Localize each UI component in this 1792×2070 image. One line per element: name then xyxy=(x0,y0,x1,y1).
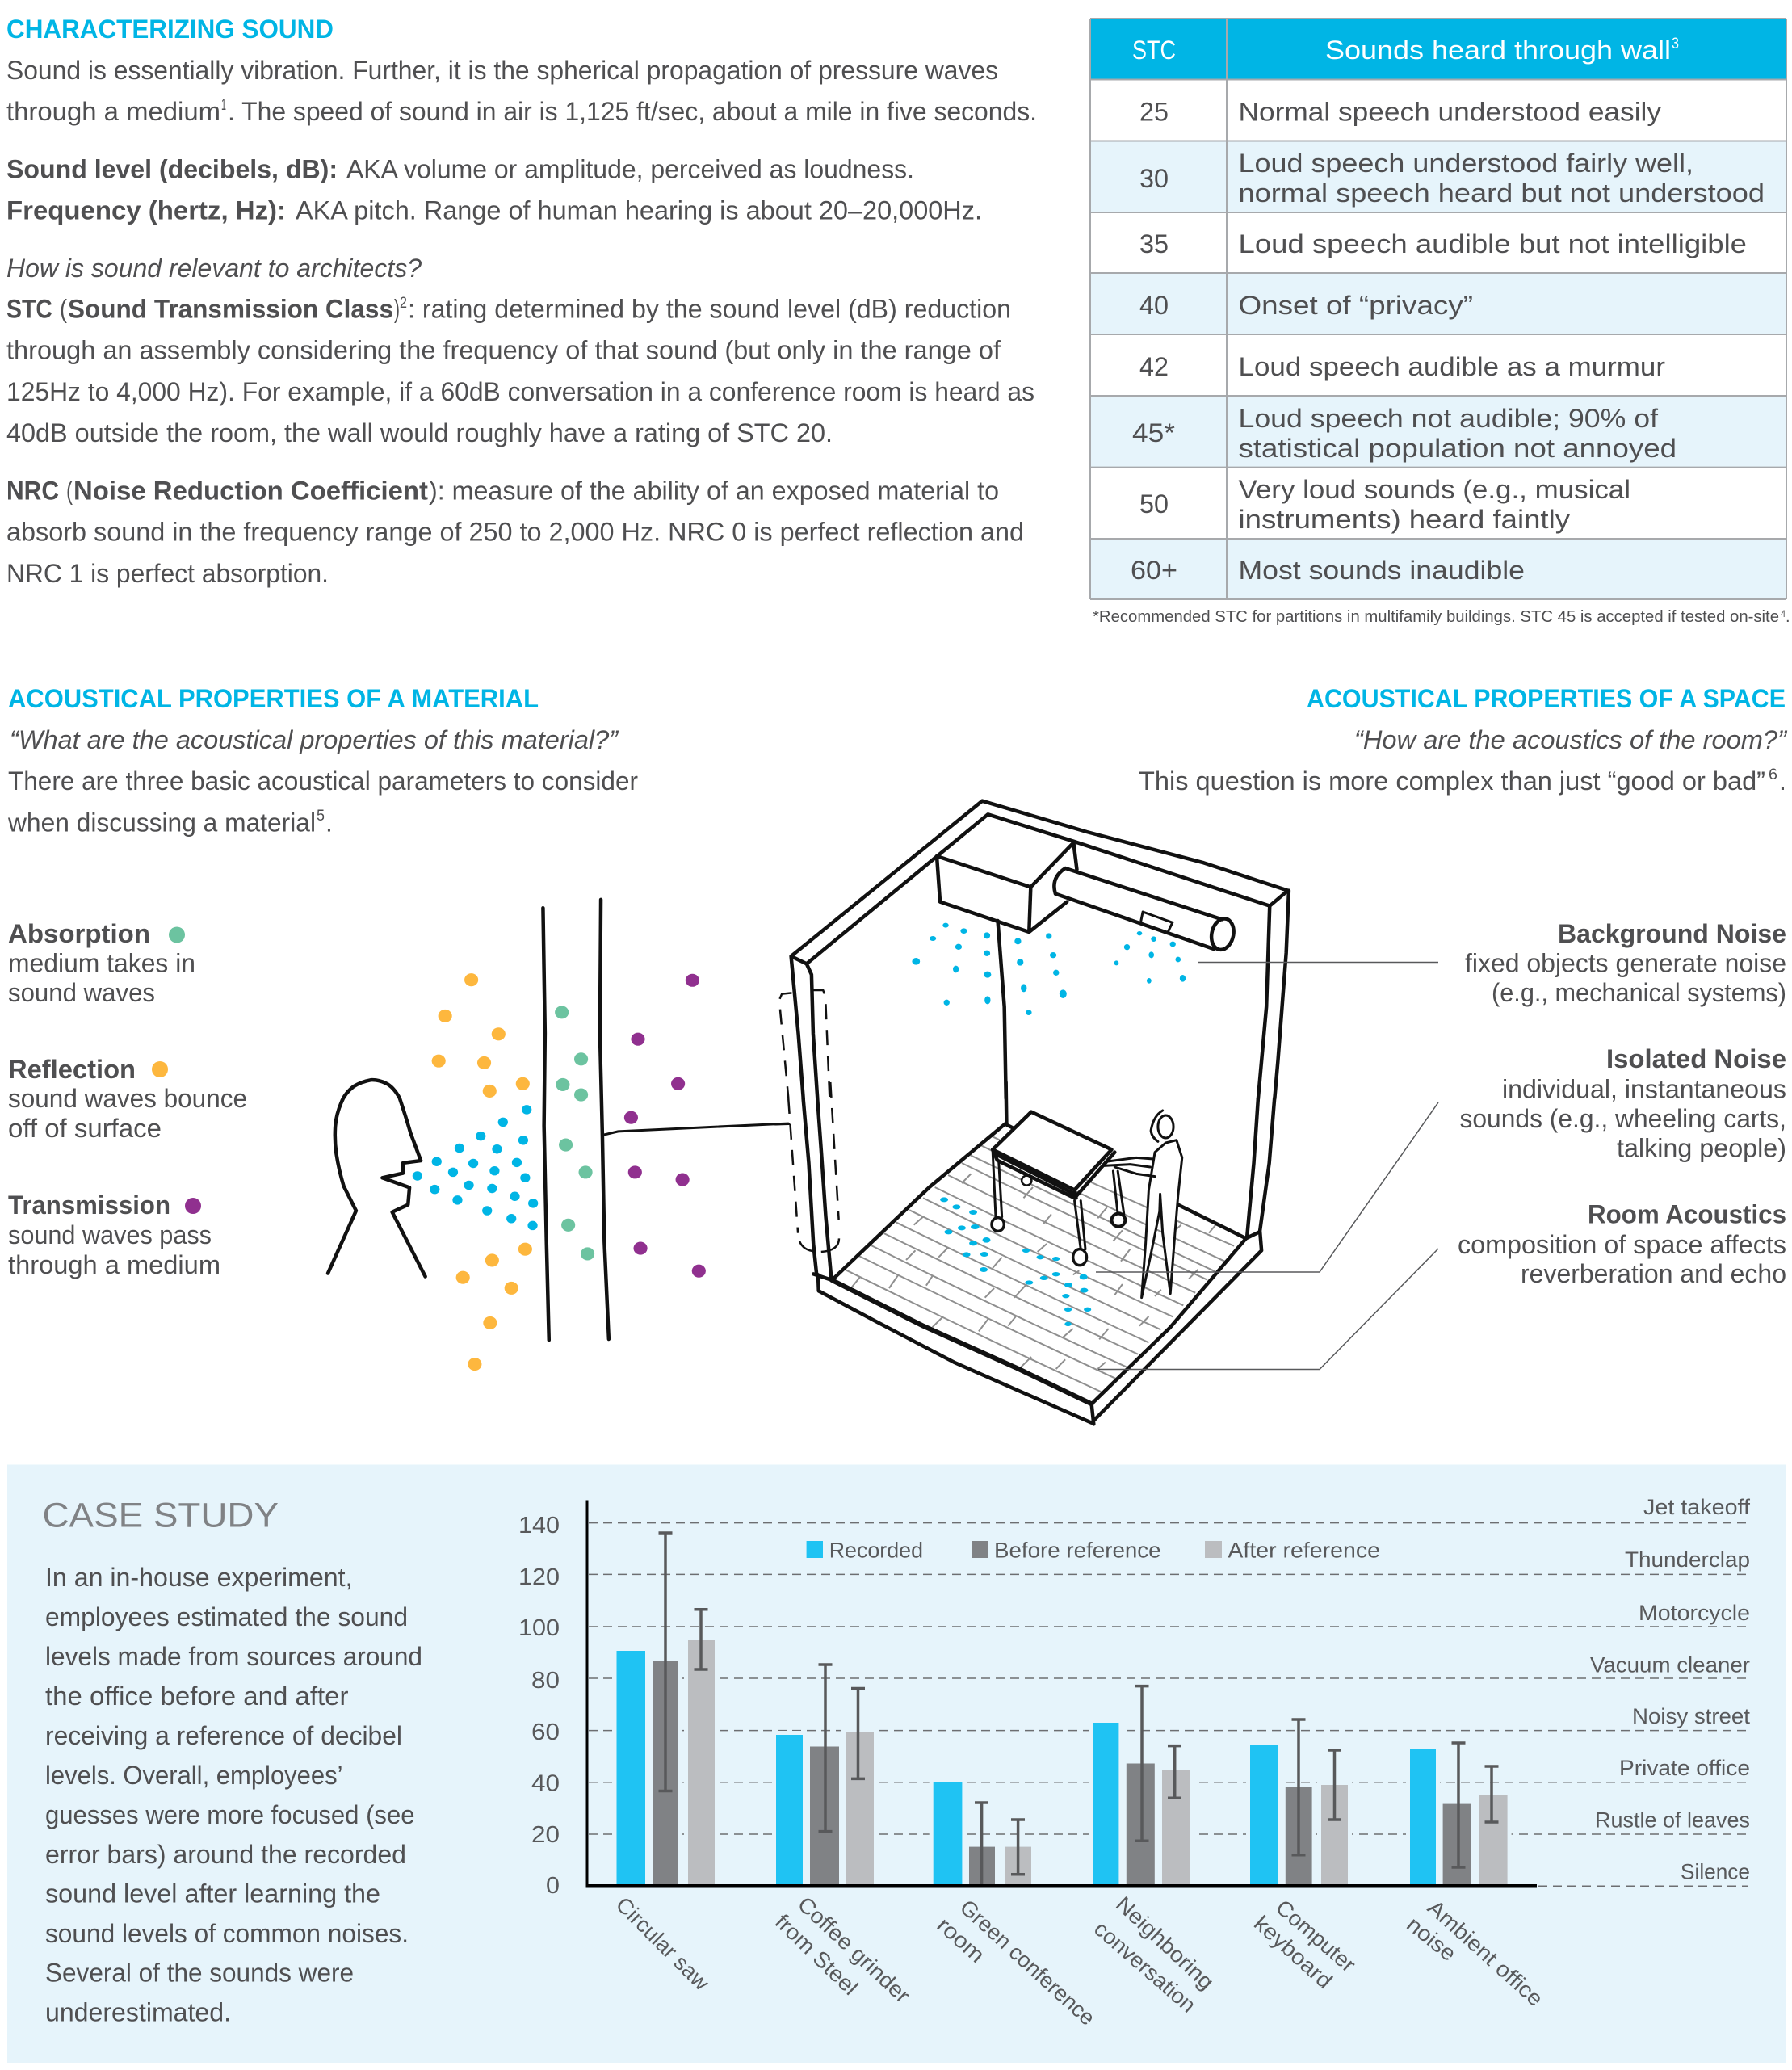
callout: background noise: Background Noise xyxy=(1558,919,1786,948)
row 40: Onset of “privacy” xyxy=(1239,291,1473,320)
footnote: *Recommended STC for partitions in multifamily buildings. STC 45 is accepted if tested on-site xyxy=(1093,608,1779,626)
text block: intro: through a medium xyxy=(6,97,220,126)
dots: absorbed sound xyxy=(555,1006,594,1260)
sound reference labels: Silence xyxy=(1681,1859,1750,1883)
text block: intro xyxy=(6,56,1037,126)
text block: STC definition: through an assembly considering the frequency of that sound (but only in the range of xyxy=(6,336,1001,365)
sound reference labels xyxy=(1590,1495,1751,1883)
y axis labels: 0 xyxy=(546,1873,560,1899)
text block: STC definition: 40dB outside the room, the wall would roughly have a rating of STC 20. xyxy=(6,418,833,447)
icon: pipe xyxy=(1054,868,1236,951)
callout: isolated noise: sounds (e.g., wheeling carts, xyxy=(1460,1104,1786,1133)
row 42: Loud speech audible as a murmur xyxy=(1239,352,1665,381)
text block: case study description: employees estimated the sound xyxy=(45,1602,408,1631)
text block: material intro: when discussing a material xyxy=(7,808,316,837)
diagram: speaker and wall with sound particles xyxy=(328,900,788,1371)
text block: STC definition: 125Hz to 4,000 Hz). For example, if a 60dB conversation in a conference room is heard as xyxy=(6,377,1034,406)
legend xyxy=(807,1538,1380,1562)
icon: cart table xyxy=(992,1112,1125,1266)
callout: background noise xyxy=(1465,919,1786,1007)
callout: background noise: fixed objects generate noise xyxy=(1465,948,1786,977)
callout lines xyxy=(1096,963,1438,1370)
sound marks: duct noise xyxy=(912,923,1067,1015)
callout: background noise: (e.g., mechanical systems) xyxy=(1492,978,1786,1007)
text block: STC definition: Sound Transmission Class xyxy=(68,295,393,324)
connector stub from material wall xyxy=(775,1123,789,1126)
row 60+: Most sounds inaudible xyxy=(1239,556,1525,585)
bars: neighboring conversation xyxy=(1093,1686,1190,1885)
legend: Recorded xyxy=(829,1538,923,1562)
icon: mechanical duct xyxy=(937,842,1076,932)
text block: NRC definition: absorb sound in the frequency range of 250 to 2,000 Hz. NRC 0 is perfect reflection and xyxy=(6,517,1024,546)
text block: material intro: “What are the acoustical properties of this material?” xyxy=(10,725,619,754)
floor boards xyxy=(844,1136,1234,1392)
text block: NRC definition: NRC 1 is perfect absorption. xyxy=(6,559,329,588)
row 50: Very loud sounds (e.g., musical xyxy=(1239,475,1630,504)
row 50 xyxy=(1139,475,1630,534)
text block: NRC definition: NRC xyxy=(6,477,59,506)
dashed callout corner xyxy=(799,1238,839,1252)
text block: case study description xyxy=(45,1563,422,2027)
text block: NRC definition xyxy=(6,477,1024,588)
connector to room wall xyxy=(602,1123,788,1135)
row 35: 35 xyxy=(1139,229,1169,258)
room lower part xyxy=(788,1082,1274,1424)
text block: NRC definition: Noise Reduction Coefficient xyxy=(73,477,428,506)
legend: transmission xyxy=(8,1190,220,1279)
row 50: 50 xyxy=(1139,489,1169,519)
text block: intro: . The speed of sound in air is 1,125 ft/sec, about a mile in five seconds. xyxy=(228,97,1037,126)
row 40 xyxy=(1139,291,1473,320)
category labels: conversation xyxy=(1089,1917,1200,2018)
diagram: room axonometric xyxy=(775,801,1289,1424)
text block: NRC definition: ( xyxy=(66,477,73,506)
y axis labels: 120 xyxy=(518,1564,560,1590)
row 35: Loud speech audible but not intelligible xyxy=(1239,229,1747,258)
callout: room acoustics xyxy=(1458,1200,1786,1288)
row 45: statistical population not annoyed xyxy=(1239,434,1677,463)
y axis labels: 60 xyxy=(531,1719,560,1745)
row 60+ xyxy=(1131,556,1525,585)
legend: reflection: sound waves bounce xyxy=(8,1084,247,1113)
legend: absorption xyxy=(8,919,195,1007)
row 50: instruments) heard faintly xyxy=(1239,505,1570,534)
text block: material intro xyxy=(7,725,638,837)
row 30: Loud speech understood fairly well, xyxy=(1239,149,1693,178)
category labels: noise xyxy=(1402,1912,1461,1966)
row 40: 40 xyxy=(1139,291,1169,320)
floor slab xyxy=(813,1232,1261,1424)
text block: STC definition: 2 xyxy=(400,295,407,312)
table header xyxy=(1090,19,1786,79)
dashed wall section callout bottom xyxy=(788,1082,839,1233)
dots: emitted sound xyxy=(413,1105,538,1230)
category labels: Neighboring xyxy=(1111,1892,1219,1994)
text block: space intro: This question is more complex than just “good or bad” xyxy=(1139,766,1765,796)
sound reference labels: Noisy street xyxy=(1632,1704,1751,1728)
text block: STC definition: : rating determined by the sound level (dB) reduction xyxy=(408,295,1011,324)
legend: absorption: Absorption xyxy=(8,919,150,948)
dashed wall section callout top xyxy=(779,990,829,1098)
category labels: Circular saw xyxy=(611,1892,714,1996)
callout: isolated noise: Isolated Noise xyxy=(1606,1044,1786,1073)
legend: transmission: sound waves pass xyxy=(8,1220,212,1249)
text block: material intro: There are three basic acoustical parameters to consider xyxy=(8,766,638,796)
back corner line xyxy=(998,921,1006,1098)
row 60+: 60+ xyxy=(1131,556,1177,585)
text block: space intro: “How are the acoustics of the room?” xyxy=(1354,725,1787,754)
legend: absorption: medium takes in xyxy=(8,948,195,977)
text block: case study description: error bars) around the recorded xyxy=(45,1840,406,1869)
room walls lower part xyxy=(804,1082,1274,1279)
text block: sound level and frequency: Frequency (hertz, Hz): xyxy=(6,195,286,225)
text block: case study description: the office before and after xyxy=(45,1682,349,1711)
legend: absorption: sound waves xyxy=(8,978,155,1007)
row 45: 45* xyxy=(1132,418,1175,447)
category labels: room xyxy=(932,1913,989,1967)
legend: reflection: Reflection xyxy=(8,1055,136,1084)
bars: ambient office noise xyxy=(1410,1743,1508,1885)
y axis labels xyxy=(518,1513,560,1899)
y axis labels: 100 xyxy=(518,1615,560,1641)
axes xyxy=(586,1501,588,1886)
text block: case study description: In an in-house experiment, xyxy=(45,1563,352,1592)
text block: STC definition: ( xyxy=(60,295,67,324)
category labels: Computer xyxy=(1271,1895,1360,1977)
row 30: normal speech heard but not understood xyxy=(1239,178,1765,208)
text block: intro: 1 xyxy=(221,97,226,114)
sound marks: floor noise xyxy=(940,1197,1091,1326)
text block: space intro xyxy=(1139,725,1787,796)
text block: case study description: sound levels of common noises. xyxy=(45,1919,409,1948)
text block: space intro: . xyxy=(1779,766,1786,796)
section: acoustical properties of a material xyxy=(7,684,788,1371)
text block: case study description: levels. Overall, employees’ xyxy=(45,1761,342,1790)
text block: case study description: receiving a reference of decibel xyxy=(45,1721,402,1750)
category labels xyxy=(611,1892,1548,2030)
bars: computer keyboard xyxy=(1250,1719,1348,1885)
sound reference labels: Vacuum cleaner xyxy=(1590,1652,1750,1677)
text block: STC definition xyxy=(6,254,1034,447)
dots: transmitted sound xyxy=(624,974,706,1278)
chart: estimated vs recorded sound level xyxy=(518,1495,1751,2030)
icon: speaking head xyxy=(328,1080,426,1277)
text block: STC definition: ) xyxy=(394,295,400,324)
table header: 3 xyxy=(1672,36,1679,52)
y axis labels: 20 xyxy=(531,1822,560,1848)
text block: STC definition: How is sound relevant to architects? xyxy=(6,254,422,283)
row 45 xyxy=(1132,404,1677,463)
room upper part xyxy=(779,801,1289,1098)
callout: isolated noise: individual, instantaneous xyxy=(1502,1074,1786,1103)
heading: characterizing sound: CHARACTERIZING SOUND xyxy=(6,15,334,44)
dots: reflected sound xyxy=(432,973,532,1371)
text block: sound level and frequency xyxy=(6,155,982,225)
category labels: Ambient office xyxy=(1423,1896,1548,2011)
legend: reflection: off of surface xyxy=(8,1114,162,1143)
text block: case study description: sound level after learning the xyxy=(45,1879,380,1908)
category labels: Coffee grinder xyxy=(793,1892,915,2008)
row 30: 30 xyxy=(1139,164,1169,193)
row 25: Normal speech understood easily xyxy=(1239,97,1661,126)
text block: sound level and frequency: AKA volume or amplitude, perceived as loudness. xyxy=(346,155,914,184)
y axis labels: 80 xyxy=(531,1668,560,1694)
row 42: 42 xyxy=(1139,352,1169,381)
text block: intro: Sound is essentially vibration. Further, it is the spherical propagation of pressure waves xyxy=(6,56,998,85)
row 30 xyxy=(1139,149,1765,208)
legend: transmission: Transmission xyxy=(8,1190,170,1220)
heading: material: ACOUSTICAL PROPERTIES OF A MATERIAL xyxy=(8,684,539,713)
callout: room acoustics: composition of space affects xyxy=(1458,1230,1786,1259)
legend: After reference xyxy=(1228,1538,1380,1562)
bars: circular saw xyxy=(617,1533,715,1885)
section: characterizing sound xyxy=(6,15,1037,588)
text block: NRC definition: ): measure of the ability of an exposed material to xyxy=(429,477,999,506)
text block: space intro: 6 xyxy=(1769,766,1777,783)
text block: sound level and frequency: AKA pitch. Range of human hearing is about 20–20,000Hz. xyxy=(296,195,982,225)
category labels: from Steel xyxy=(770,1909,862,2000)
row 45: Loud speech not audible; 90% of xyxy=(1239,404,1658,433)
text block: STC definition: STC xyxy=(6,295,52,324)
sound reference labels: Thunderclap xyxy=(1625,1547,1750,1572)
table: STC ratings xyxy=(1090,19,1786,599)
section: acoustical properties of a space xyxy=(775,684,1787,1424)
sound marks: pipe noise xyxy=(1114,931,1186,984)
category labels: keyboard xyxy=(1249,1911,1337,1993)
text block: case study description: Several of the sounds were xyxy=(45,1958,354,1987)
legend: Before reference xyxy=(994,1538,1161,1562)
table header: STC xyxy=(1132,36,1176,65)
heading: case study: CASE STUDY xyxy=(42,1496,279,1535)
sound reference labels: Rustle of leaves xyxy=(1595,1808,1750,1833)
text block: material intro: . xyxy=(325,808,333,837)
text block: case study description: levels made from sources around xyxy=(45,1642,422,1671)
sound reference labels: Private office xyxy=(1619,1756,1750,1780)
wall section xyxy=(543,900,609,1340)
footnote: 4 xyxy=(1781,608,1786,619)
footnote: . xyxy=(1786,608,1790,626)
y axis labels: 140 xyxy=(518,1513,560,1539)
table header: Sounds heard through wall xyxy=(1325,36,1671,65)
text block: case study description: guesses were more focused (see xyxy=(45,1800,415,1829)
legend: reflection xyxy=(8,1055,247,1143)
callout: isolated noise xyxy=(1460,1044,1786,1163)
sound reference labels: Jet takeoff xyxy=(1643,1495,1751,1519)
ceiling and wall edges xyxy=(791,801,1289,1098)
callout: isolated noise: talking people) xyxy=(1617,1134,1786,1163)
callout: room acoustics: Room Acoustics xyxy=(1588,1200,1786,1229)
text block: sound level and frequency: Sound level (decibels, dB): xyxy=(6,155,338,184)
text block: material intro: 5 xyxy=(317,808,325,825)
y axis labels: 40 xyxy=(531,1770,560,1796)
panel: case study xyxy=(7,1465,1786,2063)
row 25: 25 xyxy=(1139,97,1169,126)
callout: room acoustics: reverberation and echo xyxy=(1521,1259,1786,1288)
icon: person pushing cart xyxy=(1104,1111,1182,1298)
bars: coffee grinder xyxy=(776,1665,874,1885)
legend: transmission: through a medium xyxy=(8,1250,220,1279)
text block: case study description: underestimated. xyxy=(45,1998,231,2027)
bars: green conference room xyxy=(934,1782,1031,1885)
sound reference labels: Motorcycle xyxy=(1639,1601,1750,1625)
category labels: Green conference xyxy=(955,1895,1100,2030)
